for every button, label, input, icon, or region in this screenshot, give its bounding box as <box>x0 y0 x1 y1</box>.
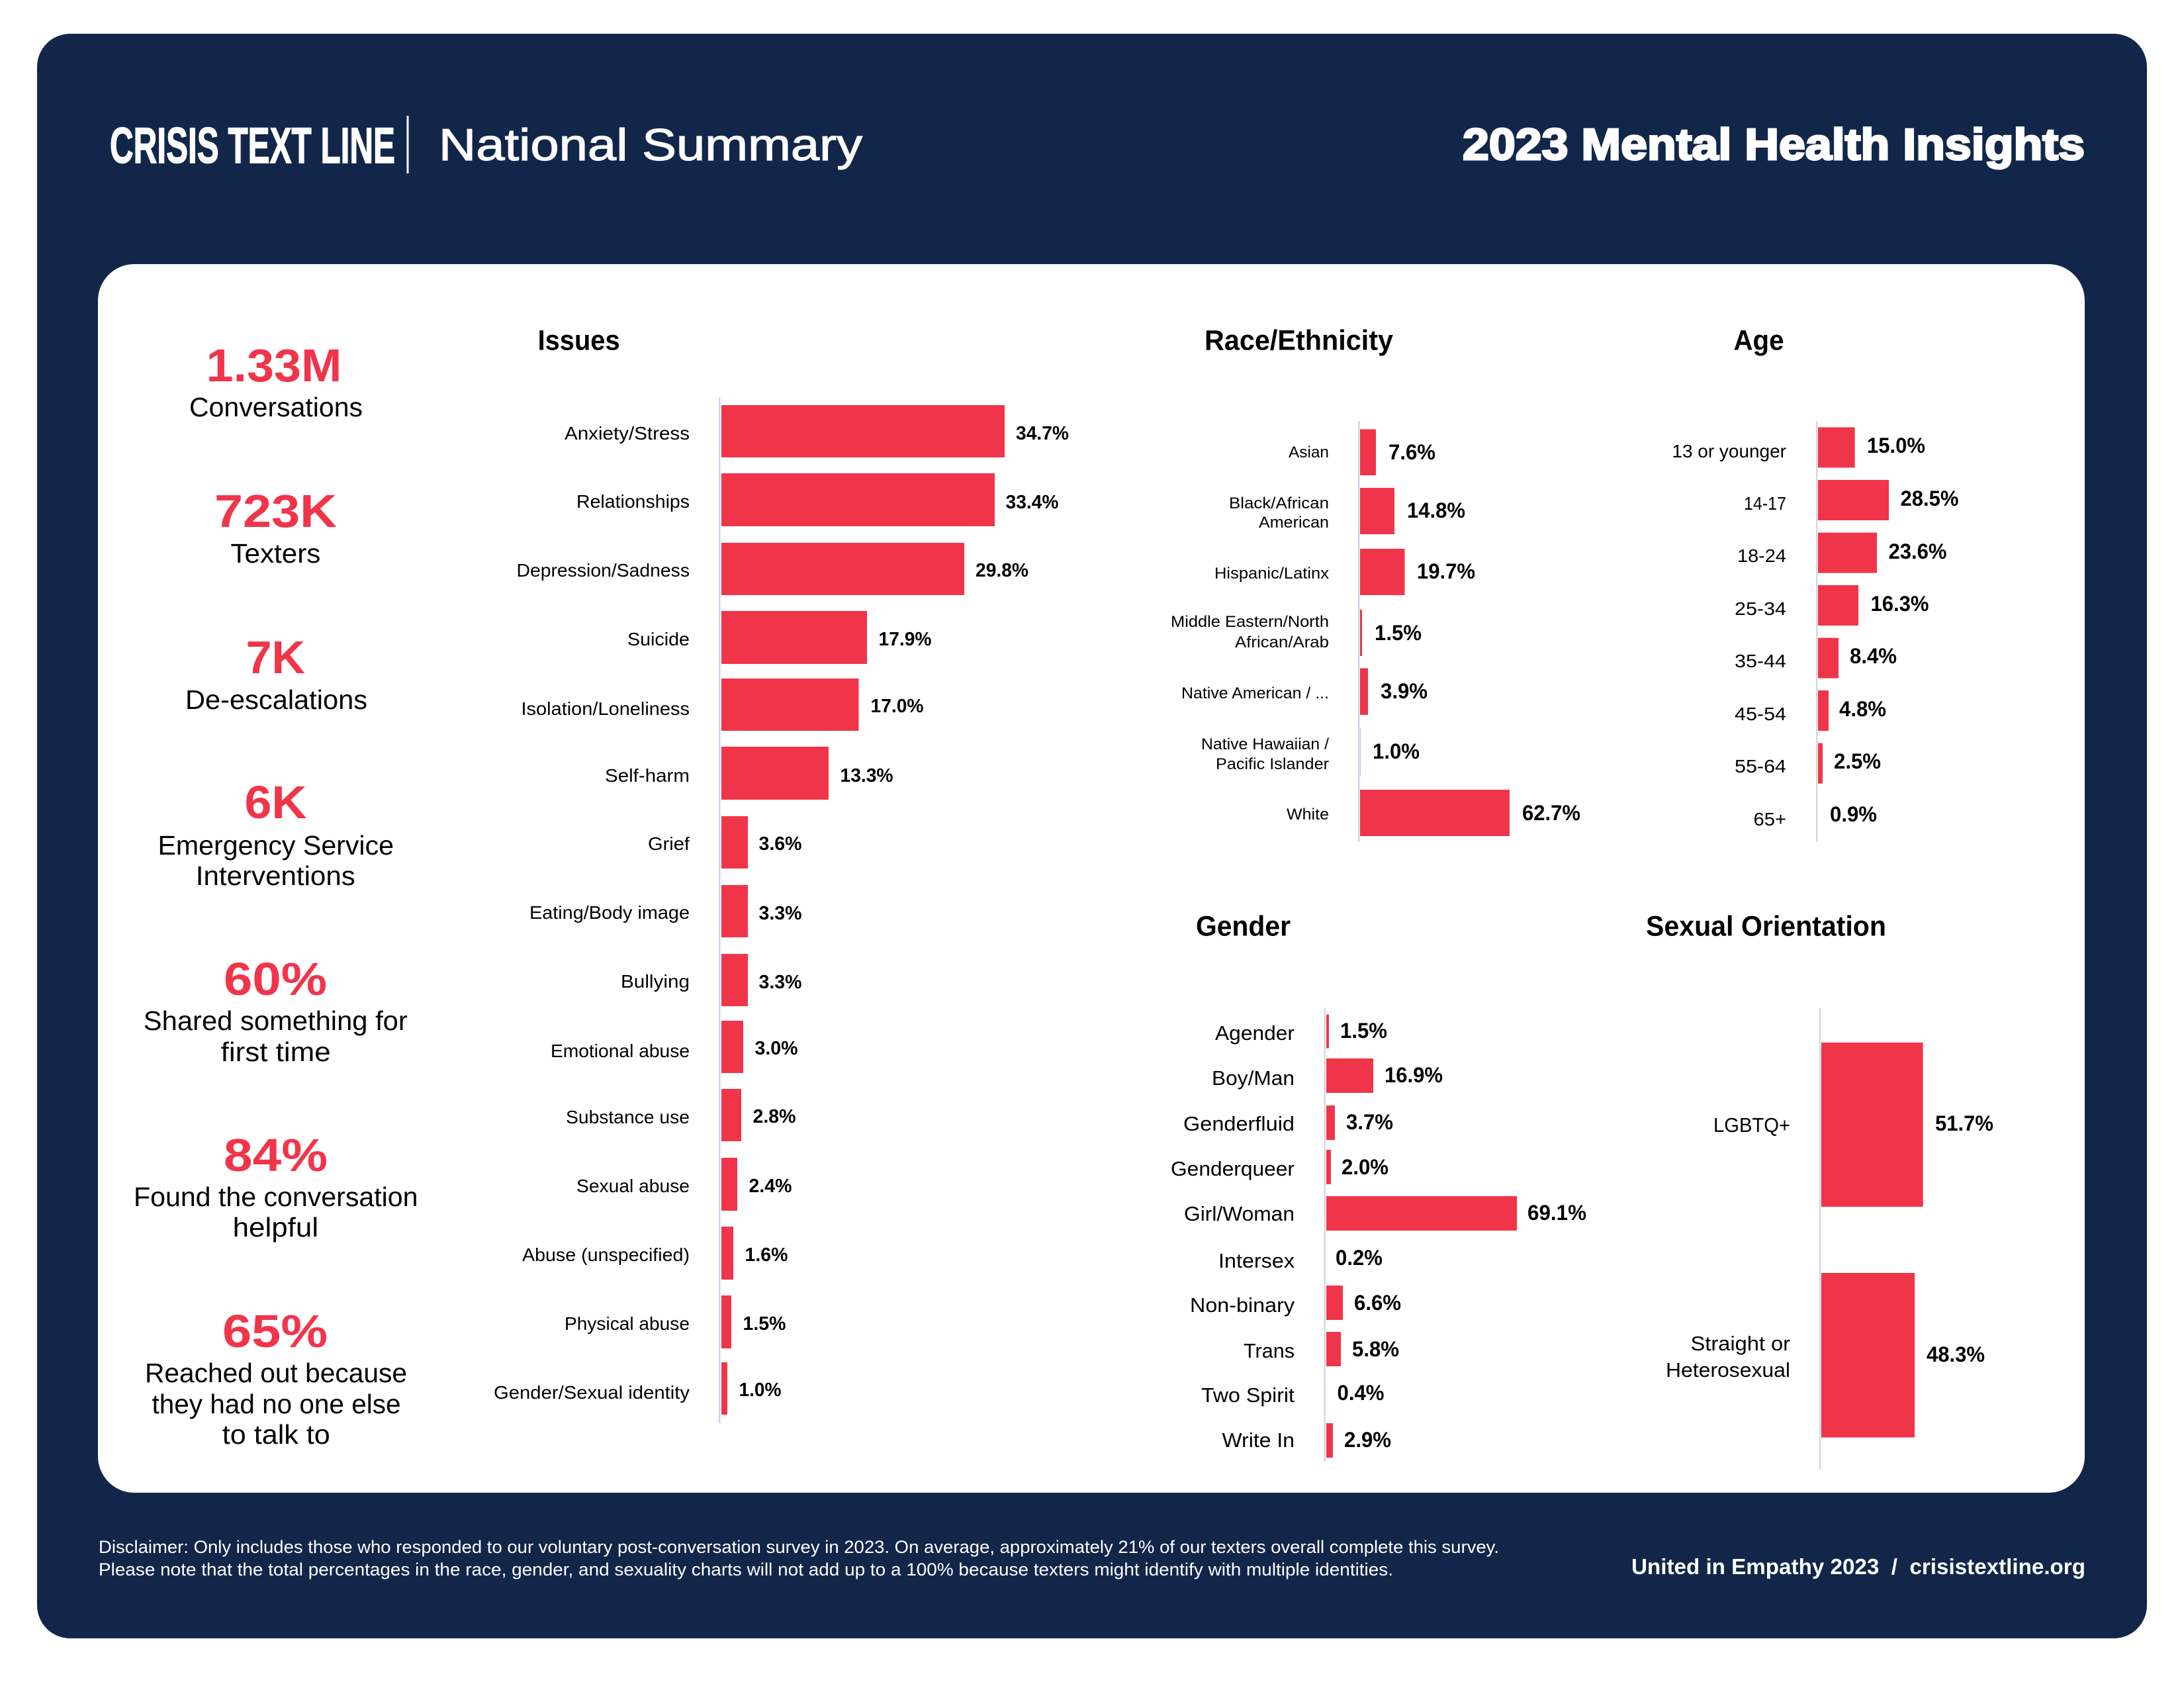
header <box>110 116 2085 174</box>
bar chart: Issues: Emotional abuse <box>551 1041 690 1061</box>
bar chart: Gender: 2.0% <box>1342 1155 1388 1179</box>
logo: Crisis Text Line: CRISIS TEXT LINE <box>110 118 395 174</box>
bar chart: Age <box>1672 421 1959 842</box>
bar chart: Gender: Genderqueer <box>1171 1157 1295 1180</box>
footer: campaign and website: United in Empathy 2023 / crisistextline.org <box>1631 1554 2085 1579</box>
bar chart: Race/Ethnicity: American <box>1259 514 1329 532</box>
bar chart: Issues: Suicide <box>627 629 690 649</box>
bar chart: Age: 4.8% <box>1839 697 1886 721</box>
bar chart: Race/Ethnicity: African/Arab <box>1235 633 1329 651</box>
bar chart: Race/Ethnicity: 1.0% <box>1373 739 1420 763</box>
bar chart: Age: 2.5% <box>1834 749 1881 773</box>
bar chart: Issues: 13.3% <box>841 765 893 786</box>
bar chart: Issues: Physical abuse <box>565 1313 690 1334</box>
bar chart: Age: 55-64 <box>1735 756 1786 776</box>
bar chart: Gender: 69.1% <box>1527 1201 1586 1225</box>
bar chart: Issues: Gender/Sexual identity <box>494 1382 690 1403</box>
bar chart: Race/Ethnicity: Native Hawaiian / <box>1201 735 1329 753</box>
bar chart: Issues: 33.4% <box>1006 492 1059 513</box>
header divider <box>406 116 409 173</box>
heading: Age: Age <box>1734 324 1784 356</box>
bar chart: Race/Ethnicity: 14.8% <box>1407 498 1465 522</box>
bar chart: Sexual Orientation: 48.3% <box>1927 1342 1985 1366</box>
stat: emergency service interventions: Emergency Service <box>158 830 394 861</box>
bar chart: Issues: Bullying <box>621 971 690 992</box>
bar chart: Sexual Orientation <box>1666 1008 1993 1470</box>
stat: shared for first time: 60% <box>224 953 327 1005</box>
stat: emergency service interventions: Interventions <box>196 861 355 891</box>
stat: de-escalations <box>185 632 367 715</box>
title: 2023 Mental Health Insights: 2023 Mental Health Insights <box>1463 120 2085 169</box>
bar chart: Sexual Orientation: Straight or <box>1690 1332 1790 1355</box>
bar chart: Gender: Trans <box>1244 1339 1295 1362</box>
footer: disclaimer <box>99 1537 1499 1579</box>
bar chart: Gender: 16.9% <box>1385 1063 1443 1087</box>
stat: conversations <box>189 340 363 422</box>
bar chart: Issues: 3.3% <box>758 903 802 924</box>
stat: conversations: Conversations <box>189 392 363 422</box>
bar chart: Sexual Orientation: LGBTQ+ <box>1713 1113 1790 1137</box>
bar chart: Issues: 3.3% <box>758 972 802 993</box>
bar chart: Issues: Anxiety/Stress <box>565 423 690 444</box>
bar chart: Race/Ethnicity: Hispanic/Latinx <box>1214 565 1329 583</box>
bar chart: Gender: Non-binary <box>1190 1293 1295 1317</box>
bar chart: Issues: 1.0% <box>739 1380 782 1401</box>
bar chart: Issues: Self-harm <box>605 765 690 786</box>
bar chart: Age: 0.9% <box>1830 802 1877 826</box>
bar chart: Sexual Orientation: Heterosexual <box>1666 1358 1790 1382</box>
stat: no one else to talk to: they had no one else <box>152 1389 401 1419</box>
heading: Race/Ethnicity: Race/Ethnicity <box>1205 324 1393 356</box>
bar chart: Age: 18-24 <box>1737 545 1786 566</box>
bar chart: Gender: Genderfluid <box>1183 1112 1295 1135</box>
bar chart: Issues: 2.8% <box>753 1106 796 1127</box>
bar chart: Age: 8.4% <box>1850 644 1897 668</box>
bar chart: Gender: Intersex <box>1218 1249 1295 1272</box>
bar chart: Issues: 17.0% <box>871 696 924 717</box>
stat: found conversation helpful: helpful <box>233 1212 318 1243</box>
stat: texters: 723K <box>214 485 337 537</box>
heading: Gender: Gender <box>1196 911 1291 943</box>
bar chart: Age: 23.6% <box>1889 539 1947 563</box>
stat: found conversation helpful <box>134 1129 418 1243</box>
stat: shared for first time <box>144 953 408 1067</box>
bar chart: Race/Ethnicity <box>1171 421 1580 842</box>
bar chart: Race/Ethnicity: Pacific Islander <box>1216 755 1329 773</box>
panel: key statistics <box>134 340 418 1450</box>
stat: no one else to talk to: Reached out because <box>145 1358 407 1388</box>
bar chart: Race/Ethnicity: 1.5% <box>1375 621 1422 645</box>
bar chart: Race/Ethnicity: 3.9% <box>1381 679 1428 703</box>
stat: found conversation helpful: 84% <box>224 1129 328 1181</box>
footer: disclaimer: Please note that the total percentages in the race, gender, and sexuality charts will not add up to a 100% because texters might identify with multiple identities. <box>99 1560 1393 1579</box>
stat: texters <box>214 485 337 569</box>
bar chart: Age: 15.0% <box>1867 434 1925 457</box>
bar chart: Age: 14-17 <box>1744 493 1786 514</box>
bar chart: Issues: Abuse (unspecified) <box>522 1244 690 1265</box>
bar chart: Issues: Grief <box>648 833 690 854</box>
bar chart: Issues: 1.6% <box>745 1244 788 1266</box>
stat: shared for first time: first time <box>221 1037 331 1067</box>
bar chart: Age: 25-34 <box>1735 598 1786 619</box>
bar chart: Race/Ethnicity: Asian <box>1289 444 1329 461</box>
bar chart: Gender: 0.4% <box>1337 1381 1385 1405</box>
bar chart: Issues: 17.9% <box>879 629 932 650</box>
bar chart: Gender: Girl/Woman <box>1184 1202 1295 1225</box>
title: National Summary: National Summary <box>439 120 862 170</box>
stat: texters: Texters <box>230 538 320 569</box>
stat: conversations: 1.33M <box>206 340 341 391</box>
bar chart: Gender: Write In <box>1222 1429 1295 1452</box>
bar chart: Gender: 0.2% <box>1336 1246 1383 1270</box>
bar chart: Issues: Depression/Sadness <box>516 560 690 581</box>
bar chart: Issues: Eating/Body image <box>529 902 690 923</box>
bar chart: Issues: 3.6% <box>758 833 802 855</box>
stat: no one else to talk to: 65% <box>222 1305 328 1357</box>
stat: emergency service interventions <box>158 776 394 891</box>
bar chart: Race/Ethnicity: Black/African <box>1229 494 1329 512</box>
heading: Issues: Issues <box>538 324 620 356</box>
bar chart: Gender: 1.5% <box>1340 1019 1387 1043</box>
bar chart: Race/Ethnicity: 62.7% <box>1522 801 1580 825</box>
bar chart: Age: 35-44 <box>1735 651 1786 671</box>
bar chart: Issues <box>494 397 1069 1423</box>
bar chart: Age: 13 or younger <box>1672 441 1786 461</box>
bar chart: Issues: 34.7% <box>1016 423 1069 444</box>
bar chart: Gender: 2.9% <box>1344 1428 1391 1452</box>
bar chart: Issues: 1.5% <box>743 1313 786 1335</box>
bar chart: Race/Ethnicity: Native American / ... <box>1181 684 1329 702</box>
bar chart: Gender: 3.7% <box>1346 1110 1393 1134</box>
bar chart: Issues: 2.4% <box>749 1176 792 1197</box>
bar chart: Race/Ethnicity: Middle Eastern/North <box>1171 613 1329 631</box>
bar chart: Sexual Orientation: 51.7% <box>1935 1111 1993 1135</box>
bar chart: Gender: Agender <box>1215 1021 1295 1045</box>
bar chart: Gender <box>1171 1008 1586 1462</box>
stat: found conversation helpful: Found the conversation <box>134 1182 418 1212</box>
bar chart: Issues: Relationships <box>576 491 690 512</box>
bar chart: Gender: Boy/Man <box>1212 1066 1295 1090</box>
bar chart: Issues: Isolation/Loneliness <box>522 698 690 719</box>
bar chart: Issues: Substance use <box>566 1107 690 1127</box>
panel: white content card <box>98 264 2085 1493</box>
stat: shared for first time: Shared something for <box>144 1006 408 1036</box>
bar chart: Race/Ethnicity: White <box>1287 806 1329 823</box>
bar chart: Age: 16.3% <box>1870 592 1929 616</box>
bar chart: Age: 45-54 <box>1735 704 1786 724</box>
stat: de-escalations: De-escalations <box>185 684 367 715</box>
stat: emergency service interventions: 6K <box>245 776 307 828</box>
bar chart: Gender: Two Spirit <box>1201 1383 1295 1407</box>
bar chart: Issues: 29.8% <box>976 560 1028 581</box>
bar chart: Age: 65+ <box>1754 809 1786 829</box>
bar chart: Race/Ethnicity: 19.7% <box>1417 559 1475 583</box>
stat: no one else to talk to: to talk to <box>222 1419 330 1450</box>
bar chart: Issues: Sexual abuse <box>576 1176 690 1196</box>
stat: de-escalations: 7K <box>246 632 305 683</box>
stat: no one else to talk to <box>145 1305 407 1450</box>
bar chart: Gender: 6.6% <box>1354 1291 1401 1315</box>
bar chart: Race/Ethnicity: 7.6% <box>1388 440 1435 464</box>
bar chart: Age: 28.5% <box>1901 487 1959 510</box>
heading: Sexual Orientation: Sexual Orientation <box>1646 911 1886 943</box>
bar chart: Gender: 5.8% <box>1352 1337 1399 1361</box>
footer: disclaimer: Disclaimer: Only includes those who responded to our voluntary post-conversation survey in 2023. On average, approximately 21% of our texters overall complete this survey. <box>99 1537 1499 1557</box>
bar chart: Issues: 3.0% <box>754 1038 798 1059</box>
